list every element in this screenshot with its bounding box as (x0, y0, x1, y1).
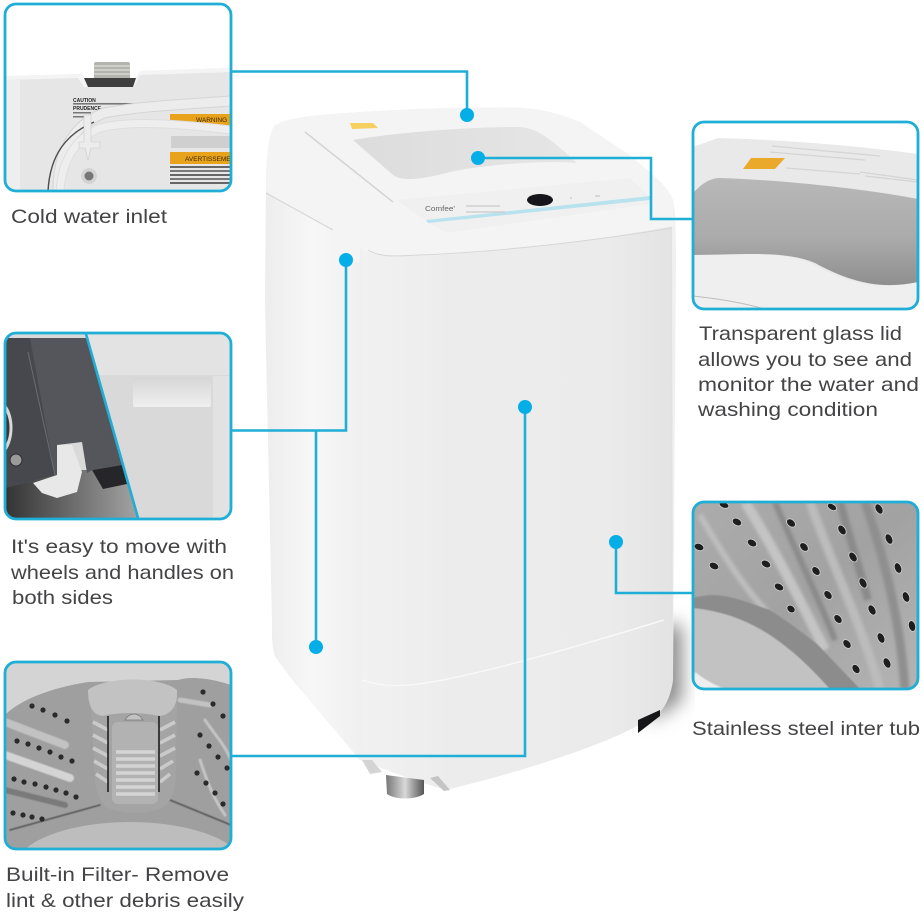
machine back (5, 68, 231, 191)
warning sticker (350, 123, 378, 129)
perforation holes (10, 689, 230, 822)
label: wheels and handles (10, 536, 234, 609)
label: transparent glass lid: Transparent glass lid (699, 323, 902, 345)
warning labels (170, 114, 230, 184)
hoses (48, 101, 231, 191)
connector: filter (231, 400, 532, 756)
connector: stainless tub (609, 535, 693, 593)
label: transparent glass lid: allows you to see and (698, 349, 912, 371)
label: wheels and handles: It's easy to move with (11, 536, 227, 558)
side face (265, 190, 362, 760)
tub floor (693, 595, 860, 689)
panel: built-in filter (4, 660, 232, 850)
control panel (397, 178, 650, 233)
panel: cold water inlet (5, 4, 239, 191)
panel: wheels and handles (5, 333, 231, 519)
wheel (33, 445, 82, 498)
lower seam (362, 620, 664, 685)
left bumper (277, 643, 290, 667)
label: built-in filter (6, 864, 244, 912)
side handle (335, 238, 360, 262)
panel: stainless steel tub (693, 500, 918, 689)
transparent lid window (353, 127, 577, 179)
label: cold water inlet: Cold water inlet (11, 206, 168, 228)
floor shadow (650, 625, 682, 722)
tub bottom (28, 822, 228, 848)
display (527, 194, 553, 206)
warning labels: AVERTISSEMENT (185, 156, 239, 163)
label: transparent glass lid (697, 323, 919, 421)
glass pane (693, 178, 918, 285)
label: built-in filter: lint & other debris easily (6, 890, 244, 912)
panel light strip (426, 196, 650, 223)
caution text: PRUDENCE (73, 106, 102, 112)
filter louvres (93, 722, 175, 782)
top cover (266, 107, 674, 256)
black foot (92, 465, 127, 489)
warning sticker (743, 158, 785, 169)
label: wheels and handles: both sides (12, 587, 113, 609)
label: transparent glass lid: washing condition (697, 399, 878, 421)
threaded inlet (84, 62, 136, 87)
diagonal divider (86, 334, 138, 518)
washer foot (386, 775, 424, 798)
connector: cold water inlet (231, 72, 474, 122)
sticker text lines (770, 146, 918, 182)
top band (86, 333, 231, 375)
side handle (133, 390, 211, 407)
dark base (5, 338, 123, 488)
screw (81, 168, 97, 184)
washing machine (265, 107, 682, 799)
connector: glass lid (471, 151, 693, 219)
washer body (265, 107, 676, 790)
panel: transparent glass lid (693, 122, 918, 309)
lint filter (88, 680, 177, 813)
base vent (638, 710, 660, 733)
lower edge (693, 296, 765, 309)
connectors (231, 72, 693, 756)
drain hose stub (362, 760, 382, 774)
label: stainless steel tub: Stainless steel inter tub (692, 718, 920, 740)
screw (10, 454, 22, 466)
perforation holes (693, 500, 917, 675)
label: wheels and handles: wheels and handles on (10, 562, 234, 584)
caution text (73, 98, 134, 118)
caution text: CAUTION (73, 98, 96, 104)
label: built-in filter: Built-in Filter- Remove (6, 864, 229, 886)
drum edge (6, 406, 12, 450)
warning labels: WARNING (196, 117, 227, 124)
leg bracket (430, 776, 450, 791)
hose clip (79, 115, 100, 160)
tub ribs (700, 502, 905, 689)
label: transparent glass lid: monitor the water and (698, 374, 919, 396)
connector: wheels and handles (231, 253, 353, 654)
lid groove (305, 132, 393, 202)
tub ribs (5, 700, 231, 830)
front face (362, 226, 673, 790)
tub rim (5, 662, 231, 715)
floor (5, 470, 139, 519)
top seam (266, 193, 672, 256)
brand: Comfee' (425, 206, 455, 213)
lid surround (694, 138, 916, 286)
